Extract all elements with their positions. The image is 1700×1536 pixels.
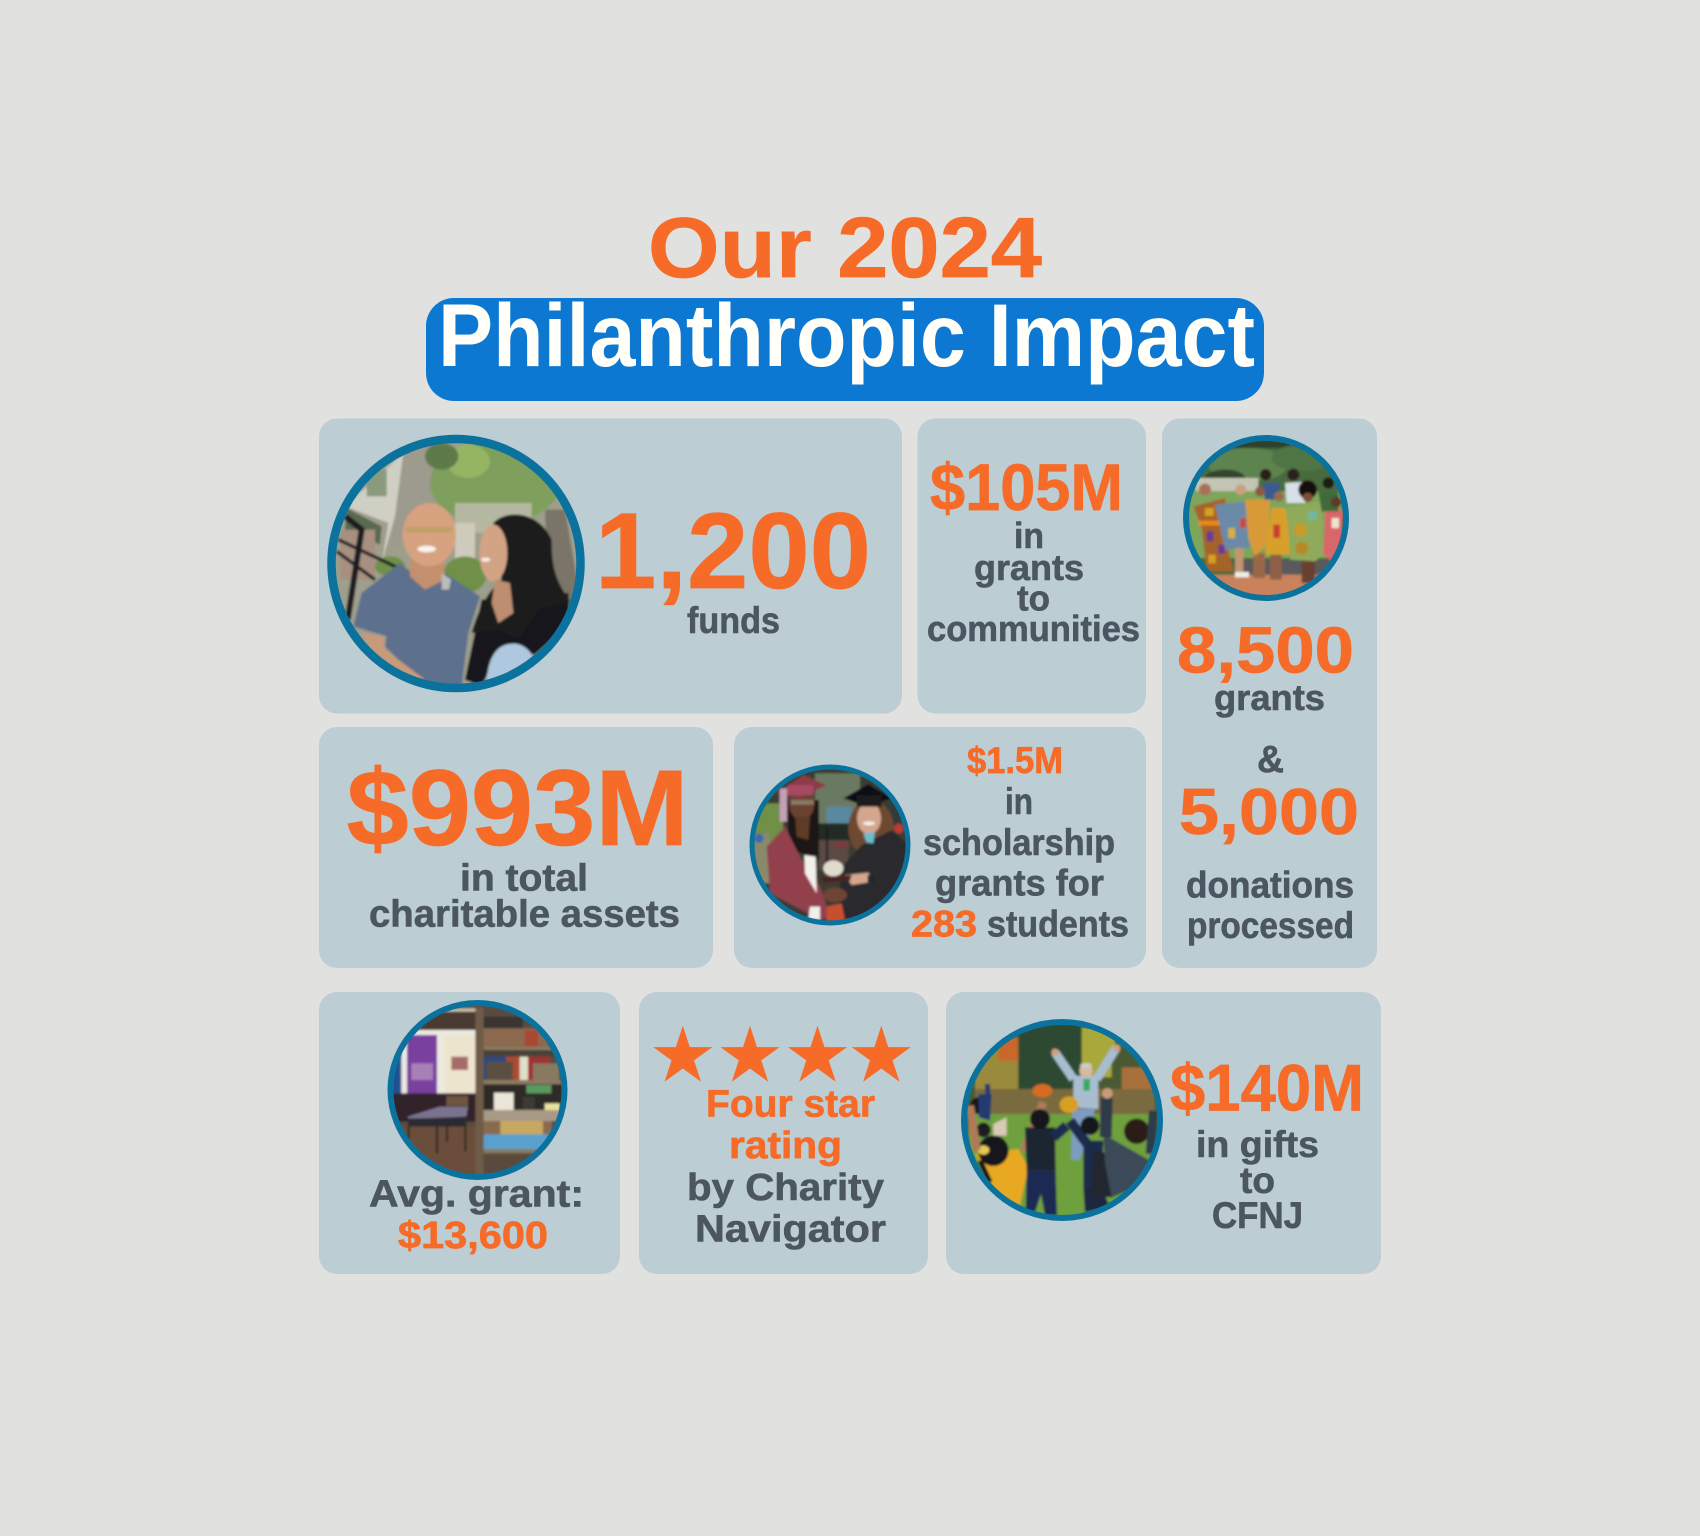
stat: 1,200: 1,200 — [595, 490, 871, 611]
stat: $105M: $105M — [930, 450, 1123, 524]
photo: children in the park — [961, 1019, 1163, 1221]
photo: library interior — [388, 1000, 568, 1180]
label: in scholarship grants for 283 students: in — [1005, 781, 1033, 822]
photo: graduate and teacher — [750, 764, 910, 926]
label: in grants to communities — [927, 515, 1140, 649]
label: in scholarship grants for 283 students: students — [987, 904, 1129, 944]
label: ampersand: & — [1257, 739, 1284, 781]
label: in gifts to CFNJ: to — [1240, 1160, 1275, 1201]
stat: $1.5M: $1.5M — [967, 740, 1063, 781]
label: in total charitable assets: in total — [460, 858, 588, 900]
label: in scholarship grants for 283 students: 283 — [911, 904, 977, 944]
label: Four star rating: rating — [729, 1125, 842, 1167]
label: by Charity Navigator: Navigator — [695, 1208, 886, 1250]
stat: $140M: $140M — [1170, 1050, 1364, 1124]
stat: 8,500: 8,500 — [1177, 614, 1354, 686]
label: in gifts to CFNJ — [1196, 1124, 1319, 1236]
label: in scholarship grants for 283 students — [911, 781, 1129, 944]
panel: $1.5M scholarship grants — [734, 727, 1146, 968]
label: Avg. grant: Avg. grant: — [369, 1174, 584, 1216]
label: in gifts to CFNJ: CFNJ — [1212, 1195, 1303, 1236]
panel: 1,200 funds — [319, 418, 902, 714]
icon: four stars — [653, 1026, 911, 1082]
panel: average grant — [319, 992, 620, 1274]
label: in grants to communities: grants — [974, 547, 1084, 588]
panel: $993M in total charitable assets — [319, 727, 713, 968]
label: Four star rating — [706, 1084, 875, 1167]
label: Four star rating: Four star — [706, 1084, 875, 1126]
label: in scholarship grants for 283 students: grants for — [935, 862, 1104, 904]
label: funds: funds — [687, 600, 780, 641]
stat: 5,000: 5,000 — [1179, 775, 1359, 848]
label: grants: grants — [1214, 677, 1325, 718]
label: donations processed: donations — [1186, 864, 1354, 906]
stat: $993M: $993M — [346, 747, 688, 868]
panel: $105M in grants — [918, 418, 1146, 714]
label: in total charitable assets: charitable assets — [369, 894, 680, 936]
photo: group in colorful dresses — [1183, 435, 1349, 601]
label: donations processed: processed — [1187, 905, 1354, 946]
infographic canvas — [319, 216, 1381, 1274]
label: by Charity Navigator: by Charity — [687, 1167, 884, 1209]
label: in grants to communities: communities — [927, 608, 1140, 649]
photo: couple laughing — [325, 433, 587, 695]
panel: four star rating — [639, 992, 928, 1274]
title pill: Philanthropic Impact: Philanthropic Impact — [438, 285, 1255, 385]
label: donations processed — [1186, 864, 1354, 946]
panel: $140M in gifts — [946, 992, 1381, 1274]
label: in gifts to CFNJ: in gifts — [1196, 1124, 1319, 1165]
label: by Charity Navigator — [687, 1167, 886, 1250]
label: in grants to communities: to — [1017, 578, 1050, 618]
panel: 8,500 grants and 5,000 donations — [1162, 418, 1377, 968]
stat: $13,600: $13,600 — [398, 1215, 548, 1257]
label: in scholarship grants for 283 students: scholarship — [923, 822, 1115, 863]
label: in total charitable assets — [369, 858, 680, 936]
title: Our 2024: Our 2024 — [648, 201, 1042, 296]
label: in grants to communities: in — [1014, 515, 1044, 556]
